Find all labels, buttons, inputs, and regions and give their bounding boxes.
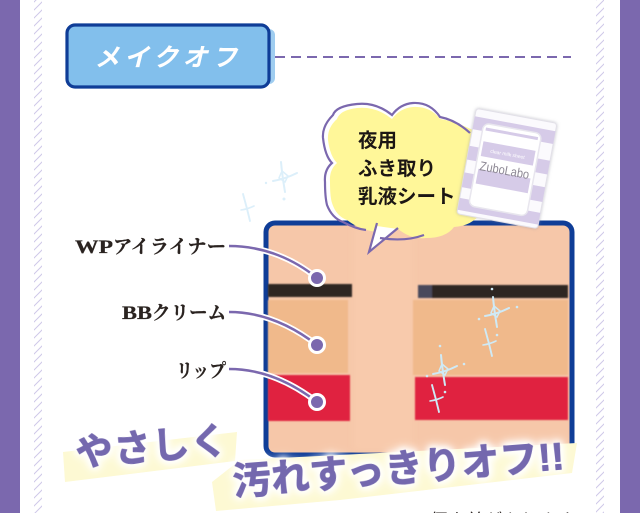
headline: 汚れすっきりオフ!!: 汚れすっきりオフ!! xyxy=(231,436,566,504)
skin comparison panel xyxy=(266,223,572,455)
callout: BBクリーム: クリーム xyxy=(152,302,226,324)
bubble text: 夜用 xyxy=(358,130,397,152)
callout: リップ: リップ xyxy=(176,360,226,382)
callout: BBクリーム: BB xyxy=(122,303,152,324)
headline: やさしく: やさしく xyxy=(74,420,229,474)
bubble text xyxy=(358,130,456,208)
section heading: メイクオフ: メイクオフ xyxy=(94,44,242,72)
speech bubble xyxy=(323,103,490,252)
section heading: メイクオフ xyxy=(67,25,275,87)
sparkles above panel xyxy=(241,162,297,221)
product: ZuboLabo sheet pack: ZuboLabo xyxy=(479,158,531,182)
bubble text: ふき取り xyxy=(358,158,436,180)
callout: WPアイライナー: アイライナー xyxy=(113,237,226,258)
eyeliner band right xyxy=(418,285,568,298)
product: ZuboLabo sheet pack xyxy=(457,108,557,229)
sparkles on panel xyxy=(426,288,518,412)
bubble text: 乳液シート xyxy=(358,186,456,208)
centre bare skin xyxy=(354,228,412,450)
lip band left xyxy=(268,375,350,421)
callout: WPアイライナー xyxy=(75,237,324,286)
BB cream band right xyxy=(413,300,568,375)
headline highlight: やさしく xyxy=(63,432,237,482)
BB cream band left xyxy=(268,300,348,373)
eyeliner band left xyxy=(268,284,352,297)
dashed line xyxy=(275,56,571,58)
lip band right xyxy=(415,377,568,420)
headline highlight: 汚れすっきりオフ!! xyxy=(212,443,577,511)
product: ZuboLabo sheet pack: clear milk sheet xyxy=(490,149,526,161)
callout: WPアイライナー: WP xyxy=(75,237,113,258)
callout: リップ xyxy=(176,360,324,410)
callout: BBクリーム xyxy=(122,302,324,352)
